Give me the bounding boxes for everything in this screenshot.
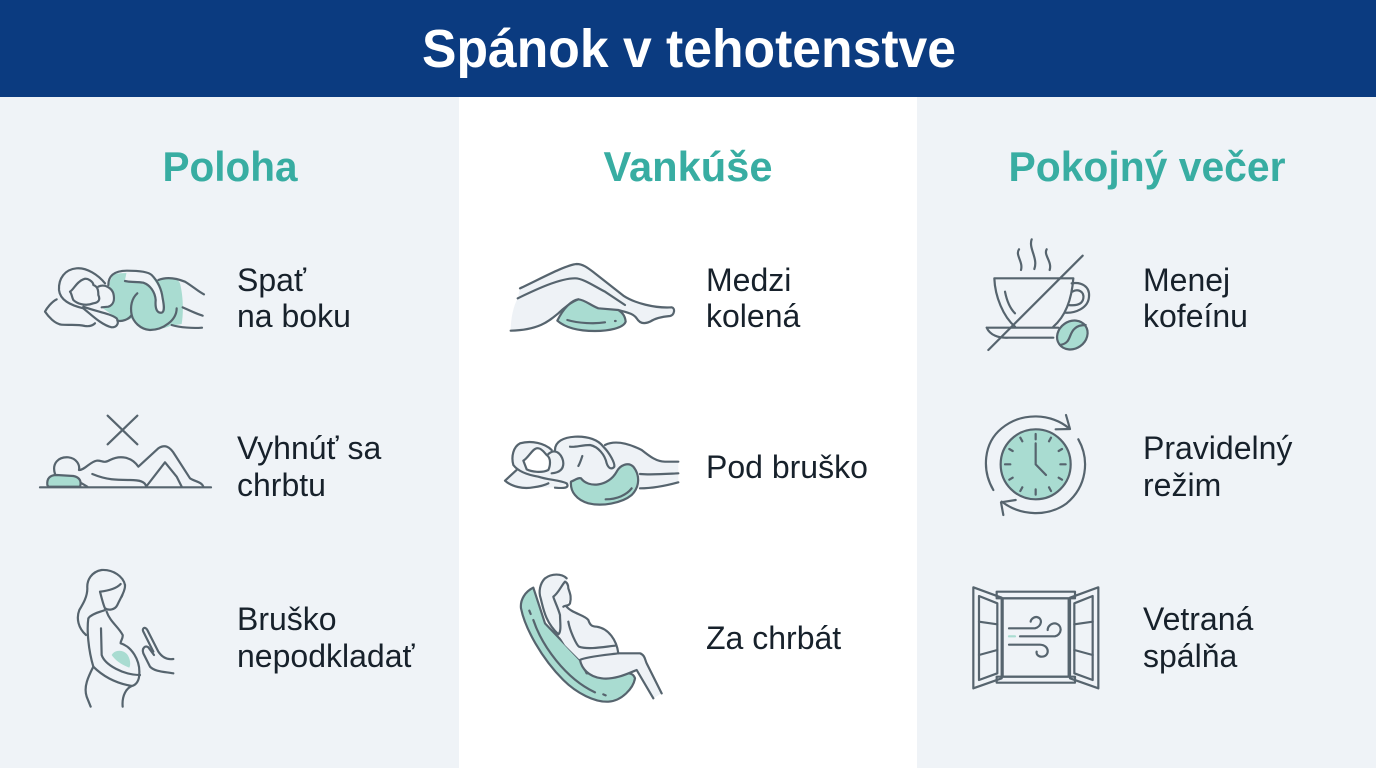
icon: sleeping on side [45,268,204,330]
header band [0,0,1376,97]
icon: clock with cycle arrows [986,415,1085,515]
text: Vetraná spálňa: Vetraná [1143,601,1253,637]
heading: Poloha: Poloha [162,143,298,190]
text: Vyhnúť sa chrbtu: chrbtu [237,467,326,503]
panel: left background [0,97,459,768]
text: Spať na boku: na boku [237,298,351,334]
text: Medzi kolená: kolená [706,298,800,334]
text: Pod bruško: Pod bruško [706,449,868,485]
text: Za chrbát: Za chrbát [706,620,841,656]
text: Vetraná spálňa: spálňa [1143,638,1238,674]
heading: Pokojný večer: Pokojný večer [1008,143,1286,190]
text: Pravidelný režim: režim [1143,467,1221,503]
icon: coffee cup crossed out [987,239,1093,355]
text: Menej kofeínu: Menej [1143,262,1230,298]
heading: Vankúše: Vankúše [604,143,772,190]
icon: pillow behind back [521,575,662,702]
panel: center background [459,97,917,768]
icon: pillow under belly [505,437,678,505]
text: Vyhnúť sa chrbtu: Vyhnúť sa [237,430,381,466]
text: Pravidelný režim: Pravidelný [1143,430,1292,466]
panel: right background [917,97,1376,768]
text: Spať na boku: Spať [237,262,306,298]
text: Bruško nepodkladať: nepodkladať [237,638,415,674]
text: Medzi kolená: Medzi [706,262,791,298]
icon: lying on back crossed [40,416,211,487]
icon: pillow between knees [511,264,674,331]
icon: open window with wind [973,587,1098,688]
text: Menej kofeínu: kofeínu [1143,298,1248,334]
title: Spánok v tehotenstve [422,19,956,79]
icon: pregnant woman with stop hand [78,570,173,707]
text: Bruško nepodkladať: Bruško [237,601,337,637]
